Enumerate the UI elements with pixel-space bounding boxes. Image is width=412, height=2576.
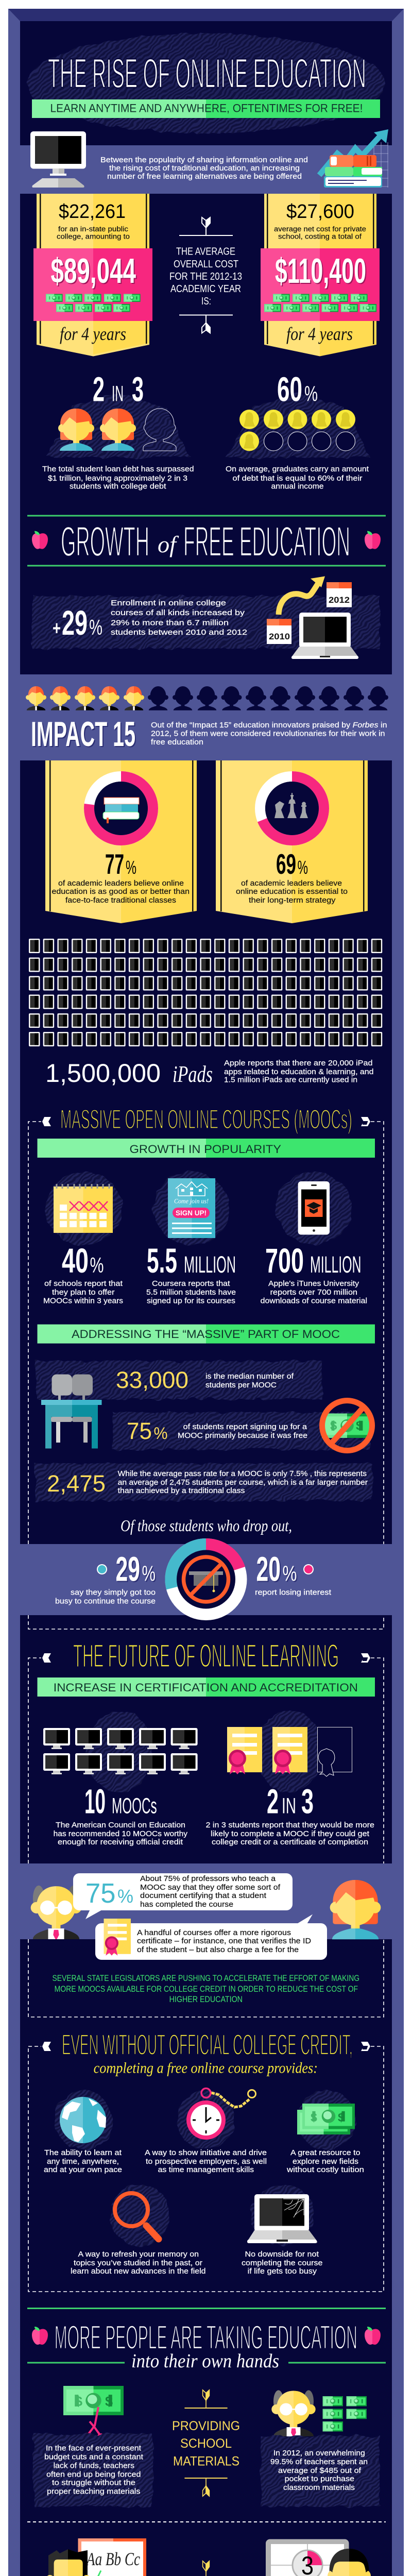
for 4 years labels: for 4 years xyxy=(286,324,353,344)
icon: certificates xyxy=(227,1727,352,1776)
icon: desktop computer xyxy=(30,131,86,188)
donut chart 69% xyxy=(260,776,324,840)
callout: state legislators xyxy=(53,1973,359,2004)
pink block: public total: $89,044 xyxy=(50,251,136,291)
for 4 years labels: for 4 years xyxy=(60,324,126,344)
column: 10 MOOCs: 10 xyxy=(84,1783,106,1821)
intro text: number of free learning alternatives are being offered xyxy=(107,172,302,181)
text: downloads of course material xyxy=(261,1297,367,1306)
column: 5.5 million Coursera xyxy=(146,1172,236,1306)
stat: 75% because free: 75 xyxy=(127,1418,152,1444)
in-state cost: $22,261 xyxy=(59,201,126,223)
text xyxy=(54,1821,188,1846)
donut chart 77% xyxy=(89,776,153,840)
text xyxy=(206,1821,374,1846)
benefit: no downside: No downside for not xyxy=(245,2250,319,2259)
section: providing school materials xyxy=(33,2386,380,2506)
icon: two filled people and one outlined xyxy=(58,409,176,451)
center average cost label: ACADEMIC YEAR xyxy=(170,283,241,295)
icon: pocket watch xyxy=(186,2089,255,2140)
intro text: the rising cost of traditional education, an increasing xyxy=(109,164,300,173)
column: 10 MOOCs: MOOCs xyxy=(112,1794,157,1819)
donut chart: 29% and 20% xyxy=(165,1538,247,1620)
stat: 33,000 students: is the median number of xyxy=(205,1372,294,1381)
speech bubble: rigorous certificate: certificate – for instance, one that verifies the ID xyxy=(137,1937,311,1945)
column: 10 MOOCs xyxy=(43,1711,198,1846)
benefit: explore new fields xyxy=(286,2090,364,2174)
icon grid: 1.5 million iPads xyxy=(29,939,382,1046)
stat: 20% lost interest: % xyxy=(282,1561,297,1586)
text: has recommended 10 MOOCs worthy xyxy=(54,1829,188,1838)
private cost: average net cost for private xyxy=(274,225,366,233)
stat: 33,000 students: 33,000 xyxy=(116,1367,188,1393)
stat: 2 in 3 students with debt: 2 xyxy=(93,370,105,409)
icon: student xyxy=(330,1880,381,1939)
for 4 years labels xyxy=(60,324,353,344)
icon: video countdown xyxy=(266,2539,349,2576)
stat: 2 in 3 students with debt xyxy=(42,370,194,490)
text: The total student loan debt has surpassed xyxy=(42,465,194,473)
speech bubble: rigorous certificate: A handful of courses offer a more rigorous xyxy=(137,1928,291,1937)
icon: professor with bills xyxy=(271,2390,367,2436)
benefit: refresh memory: learn about new advances in the field xyxy=(71,2267,206,2276)
green banner: growth in popularity xyxy=(37,1139,375,1158)
text xyxy=(270,2449,368,2492)
text: Enrollment in online college xyxy=(111,599,226,607)
text: of academic leaders believe xyxy=(241,879,342,888)
icon: magnifying glass xyxy=(115,2193,159,2239)
text: annual income xyxy=(271,482,323,490)
speech bubble: 75% of professors: % xyxy=(117,1886,133,1907)
center average cost label: FOR THE 2012-13 xyxy=(169,271,242,282)
speech bubble: rigorous certificate xyxy=(95,1914,327,1960)
text: proper teaching materials xyxy=(47,2487,140,2496)
center label: PROVIDING xyxy=(172,2419,240,2433)
benefit: no downside: completing the course xyxy=(242,2259,322,2267)
text: In 2012, an overwhelming xyxy=(273,2449,365,2458)
icon: sign-up flyer xyxy=(168,1178,215,1238)
text: 2 in 3 students report that they would be more xyxy=(206,1821,374,1829)
text: education is as good as or better than xyxy=(52,887,190,896)
column: 2 in 3 certificates: IN xyxy=(282,1794,296,1819)
text: budget cuts and a constant xyxy=(44,2452,144,2462)
ribbon: 69% of academic leaders: 69 xyxy=(276,848,296,880)
text: college credit or a certificate of completion xyxy=(212,1838,368,1846)
stat: 33,000 students xyxy=(36,1361,322,1399)
icon: ten monitors xyxy=(43,1728,198,1774)
center average cost label: IS: xyxy=(201,296,211,307)
text: of debt that is equal to 60% of their xyxy=(233,474,363,483)
stat: 20% lost interest xyxy=(255,1550,332,1597)
stat: 29% too busy: busy to continue the course xyxy=(55,1597,156,1605)
heading: even without official college credit xyxy=(42,2028,370,2076)
stat: 75% because free: % xyxy=(153,1424,168,1443)
stat: 2,475 pass rate: 2,475 xyxy=(47,1470,106,1497)
icon: stack of bills: $ xyxy=(311,2111,317,2124)
center average cost label: THE AVERAGE xyxy=(176,246,235,258)
text: 99.5% of teachers spent an xyxy=(270,2458,368,2466)
icon: stack of bills: $ xyxy=(338,2111,345,2124)
text xyxy=(224,1059,374,1084)
text: face-to-face traditional classes xyxy=(65,896,176,905)
text: courses of all kinds increased by xyxy=(111,608,245,617)
speech bubble: 75% of professors xyxy=(73,1873,293,1919)
panel: professor and student speech xyxy=(20,1863,392,1960)
icon: chalkboard xyxy=(78,2538,146,2576)
benefit: explore new fields: explore new fields xyxy=(293,2157,358,2166)
text: free education xyxy=(151,738,203,747)
text: to struggle without the xyxy=(52,2479,135,2487)
text: $1 trillion, leaving approximately 2 in 3 xyxy=(48,474,187,483)
green banner: addressing massive xyxy=(37,1325,375,1344)
stat: +29% enrollment: 29 xyxy=(62,604,88,642)
stat: 2 in 3 students with debt: IN xyxy=(112,381,124,406)
people row: 5 of 15 highlighted xyxy=(26,686,388,710)
icon: phone with graduation cap xyxy=(298,1181,330,1234)
stat: 1,500,000 iPads xyxy=(45,1059,374,1088)
text: signed up for its courses xyxy=(147,1297,235,1306)
benefit: learn any time: The ability to learn at xyxy=(44,2148,122,2157)
stat: 2 in 3 students with debt: 3 xyxy=(132,370,144,409)
scribble behind title xyxy=(27,33,385,133)
column: 2 in 3 certificates: 2 xyxy=(267,1783,279,1821)
icon: stack of bills xyxy=(297,2104,355,2134)
text: apps related to education & learning, and xyxy=(224,1067,374,1076)
speech bubble: 75% of professors: has completed the course xyxy=(140,1900,233,1909)
benefit: show initiative: A way to show initiative and drive xyxy=(145,2148,267,2157)
green subtitle banner xyxy=(32,99,380,118)
benefit: show initiative: as time management skills xyxy=(158,2165,254,2174)
stat: 2,475 pass rate: an average of 2,475 students per course, which is a far larger number xyxy=(118,1478,368,1487)
text xyxy=(43,1279,123,1306)
ribbon: 69% of academic leaders xyxy=(216,760,368,923)
benefit: refresh memory xyxy=(71,2184,206,2276)
left yellow ribbon xyxy=(37,194,149,357)
text xyxy=(236,879,348,905)
private cost: school, costing a total of xyxy=(278,233,362,240)
column: 5.5 million Coursera: MILLION xyxy=(184,1251,236,1278)
icon: no money xyxy=(322,1400,372,1451)
benefit: refresh memory: A way to refresh your memory on xyxy=(78,2250,199,2259)
text: Apple reports that there are 20,000 iPad xyxy=(224,1059,373,1067)
text: they plan to offer xyxy=(52,1288,115,1297)
column: 40% of schools: % xyxy=(90,1253,104,1277)
text: The American Council on Education xyxy=(56,1821,185,1829)
icon: globe xyxy=(60,2097,106,2143)
intro band xyxy=(20,129,392,194)
icon: professor xyxy=(31,1886,81,1939)
icon: calendars, arrow and laptop: 2010 xyxy=(269,632,290,641)
text xyxy=(226,465,369,490)
ribbon: 77% of academic leaders xyxy=(45,760,197,923)
stat: 20% lost interest: 20 xyxy=(256,1550,281,1589)
in-state cost: college, amounting to xyxy=(57,233,130,240)
center average cost label: OVERALL COST xyxy=(174,259,238,270)
stat: 75% because free xyxy=(113,1412,370,1450)
icon: calendar xyxy=(54,1184,113,1233)
icon: no money: $ xyxy=(330,1419,337,1433)
column: 40% of schools xyxy=(43,1172,123,1306)
ribbon: 77% of academic leaders: 77 xyxy=(105,848,124,880)
text xyxy=(151,721,387,747)
center label xyxy=(176,2561,236,2576)
speech bubble: 75% of professors: About 75% of professors who teach a xyxy=(140,1874,276,1883)
text: 5.5 million students have xyxy=(146,1288,236,1297)
stat: 1,500,000 iPads: iPads xyxy=(173,1061,213,1087)
stat: 29% too busy: % xyxy=(142,1561,156,1586)
green banner: certification xyxy=(37,1677,375,1697)
benefit: explore new fields: A great resource to xyxy=(290,2148,360,2157)
stat: 60% of income: 60 xyxy=(277,370,302,409)
stat: 2,475 pass rate: than achieved by a traditional class xyxy=(118,1486,245,1495)
icon: Sal Khan xyxy=(328,2549,371,2576)
speech bubble: 75% of professors: MOOC say that they offer some sort of xyxy=(140,1883,281,1892)
benefit: no downside xyxy=(242,2185,322,2276)
section: creating free schools xyxy=(33,2538,379,2576)
stat: 1,500,000 iPads: 1,500,000 xyxy=(45,1059,161,1088)
heading: even without official college credit: completing a free online course provides: xyxy=(94,2060,318,2076)
benefit: learn any time xyxy=(44,2090,122,2174)
callout: state legislators: HIGHER EDUCATION xyxy=(169,1994,243,2004)
icon: books and rising arrow xyxy=(319,129,388,188)
text: Apple's iTunes University xyxy=(268,1279,359,1288)
column: 700 million iTunes U: 700 xyxy=(265,1242,304,1280)
center label: SCHOOL xyxy=(180,2436,232,2451)
center label: MATERIALS xyxy=(173,2454,239,2469)
heading: more people are taking education into their own hands: into their own hands xyxy=(131,2350,279,2372)
column: 40% of schools: 40 xyxy=(62,1242,89,1280)
green banner: growth in popularity: GROWTH IN POPULARITY xyxy=(130,1143,281,1156)
column: 700 million iTunes U xyxy=(261,1172,367,1306)
icon: chess pieces xyxy=(274,793,308,818)
benefit: show initiative: to prospective employers, as well xyxy=(146,2157,267,2166)
benefit: explore new fields: without costly tuition xyxy=(286,2165,364,2174)
stat: +29% enrollment: % xyxy=(89,615,102,639)
text xyxy=(261,1279,367,1306)
column: 5.5 million Coursera: 5.5 xyxy=(147,1242,177,1280)
text: average of $485 out of xyxy=(278,2466,362,2475)
text: students between 2010 and 2012 xyxy=(111,628,247,637)
heading: growth of free education: GROWTH xyxy=(61,518,149,565)
dashed panel outline: future of learning xyxy=(28,1658,384,2017)
text: 29% to more than 6.7 million xyxy=(111,618,229,627)
heading: growth of free education: of xyxy=(158,531,179,557)
text: students with college debt xyxy=(70,482,166,490)
icon: no graduation cap xyxy=(183,1557,229,1602)
panel: cost banners xyxy=(33,194,380,357)
benefit: learn any time: and at your own pace xyxy=(44,2165,122,2174)
dashed panel outline: without credit xyxy=(28,2046,384,2292)
text xyxy=(111,599,247,637)
icon: teacher with pointer xyxy=(46,2549,101,2576)
icon: coins xyxy=(239,410,355,451)
pink block: private total xyxy=(261,248,380,321)
panel: impact 15 xyxy=(20,674,392,760)
right yellow ribbon xyxy=(264,194,376,357)
icon: cut bill and scissors: $ xyxy=(105,2394,113,2409)
text xyxy=(52,879,190,905)
speech bubble: rigorous certificate: of the student – but also charge a fee for the xyxy=(137,1945,299,1954)
text: On average, graduates carry an amount xyxy=(226,465,369,473)
stat: 2,475 pass rate: While the average pass rate for a MOOC is only 7.5% , this represents xyxy=(118,1469,367,1478)
icon: sign-up flyer: Come join us! xyxy=(174,1197,209,1205)
private cost xyxy=(274,201,366,240)
icon: desk and chair xyxy=(41,1375,102,1449)
stat: 60% of income: % xyxy=(304,381,318,406)
text: of academic leaders believe online xyxy=(58,879,184,888)
icon: chalkboard: Aa Bb Cc xyxy=(85,2549,140,2569)
script heading: drop outs: Of those students who drop out, xyxy=(121,1516,292,1535)
benefit: refresh memory: topics you’ve studied in the past, or xyxy=(74,2259,202,2267)
icon: cut bill and scissors xyxy=(63,2386,124,2441)
icon: laptop with cobweb xyxy=(247,2194,317,2243)
ribbon: 77% of academic leaders: % xyxy=(126,857,136,878)
stat: +29% enrollment xyxy=(32,576,380,659)
text: 1.5 million iPads are currently used in xyxy=(224,1076,357,1084)
icon: cut bill and scissors: $ xyxy=(75,2394,82,2409)
text: pocket to purchase xyxy=(285,2475,354,2483)
in-state cost xyxy=(57,201,130,240)
icon: books xyxy=(103,798,139,823)
benefit: learn any time: any time, anywhere, xyxy=(47,2157,119,2166)
text xyxy=(42,465,194,490)
column: 2 in 3 certificates xyxy=(206,1711,374,1846)
in-state cost: for an in-state public xyxy=(58,225,128,233)
heading: growth of free education xyxy=(27,515,386,567)
text: online education is essential to xyxy=(236,887,348,896)
benefit: show initiative xyxy=(145,2089,267,2174)
text xyxy=(44,2444,144,2496)
panel: drop-out reasons xyxy=(20,1538,392,1620)
green banner: certification: INCREASE IN CERTIFICATION AND ACCREDITATION xyxy=(54,1681,358,1694)
text: In the face of ever-present xyxy=(46,2444,142,2452)
stat: 33,000 students: students per MOOC xyxy=(205,1381,277,1389)
text: Out of the “Impact 15” education innovators praised by Forbes in xyxy=(151,721,387,730)
ribbon: 69% of academic leaders: % xyxy=(298,857,308,878)
stat: 75% because free: MOOC primarily because it was free xyxy=(178,1431,307,1440)
text: of schools report that xyxy=(44,1279,123,1288)
text: Coursera reports that xyxy=(152,1279,230,1288)
heading: IMPACT 15 xyxy=(31,715,135,754)
green subtitle banner: LEARN ANYTIME AND ANYWHERE, OFTENTIMES FOR FREE! xyxy=(50,102,363,115)
speech bubble: 75% of professors: 75 xyxy=(85,1878,115,1909)
stat: 75% because free: of students report signing up for a xyxy=(183,1422,307,1431)
center label xyxy=(172,2390,240,2496)
pink block: public total xyxy=(33,248,152,321)
icon: no money: $ xyxy=(356,1419,363,1433)
text: classroom materials xyxy=(283,2483,355,2492)
green banner: addressing massive: ADDRESSING THE “MASSIVE” PART OF MOOC xyxy=(72,1328,340,1341)
text: often end up being forced xyxy=(46,2470,141,2479)
heading: more people are taking education into their own hands xyxy=(27,2308,386,2372)
icon: sign-up flyer: SIGN UP! xyxy=(176,1209,207,1217)
text: their long-term strategy xyxy=(249,896,336,905)
benefit: no downside: if life gets too busy xyxy=(248,2267,317,2276)
private cost: $27,600 xyxy=(286,201,354,223)
text: enough for receiving official credit xyxy=(58,1838,183,1846)
stat: 29% too busy xyxy=(55,1550,156,1605)
stat: 20% lost interest: report losing interest xyxy=(255,1588,332,1597)
center average cost label xyxy=(169,217,242,333)
text: 2012, 5 of them were considered revolutionaries for their work in xyxy=(151,730,385,738)
text: reports over 700 million xyxy=(270,1288,357,1297)
column: 700 million iTunes U: MILLION xyxy=(310,1251,362,1278)
column: 2 in 3 certificates: 3 xyxy=(301,1783,314,1821)
icon: calendars, arrow and laptop xyxy=(267,576,358,659)
text xyxy=(146,1279,236,1306)
dashed panel outline: MOOCs xyxy=(28,1122,384,1629)
hero section xyxy=(27,33,385,133)
text: lack of funds, teachers xyxy=(54,2462,134,2470)
stat: 29% too busy: say they simply got too xyxy=(71,1588,156,1597)
stat: 2,475 pass rate xyxy=(36,1463,373,1501)
icon: calendars, arrow and laptop: 2012 xyxy=(329,595,350,605)
stat: 60% of income xyxy=(226,370,370,490)
intro text: Between the popularity of sharing information online and xyxy=(100,156,308,164)
intro text xyxy=(100,156,308,181)
stat: +29% enrollment: + xyxy=(53,618,61,639)
text: likely to complete a MOOC if they could get xyxy=(211,1829,370,1838)
speech bubble: 75% of professors: document certifying that a student xyxy=(140,1891,267,1900)
text: MOOCs within 3 years xyxy=(43,1297,123,1306)
stat: 29% too busy: 29 xyxy=(115,1550,140,1589)
